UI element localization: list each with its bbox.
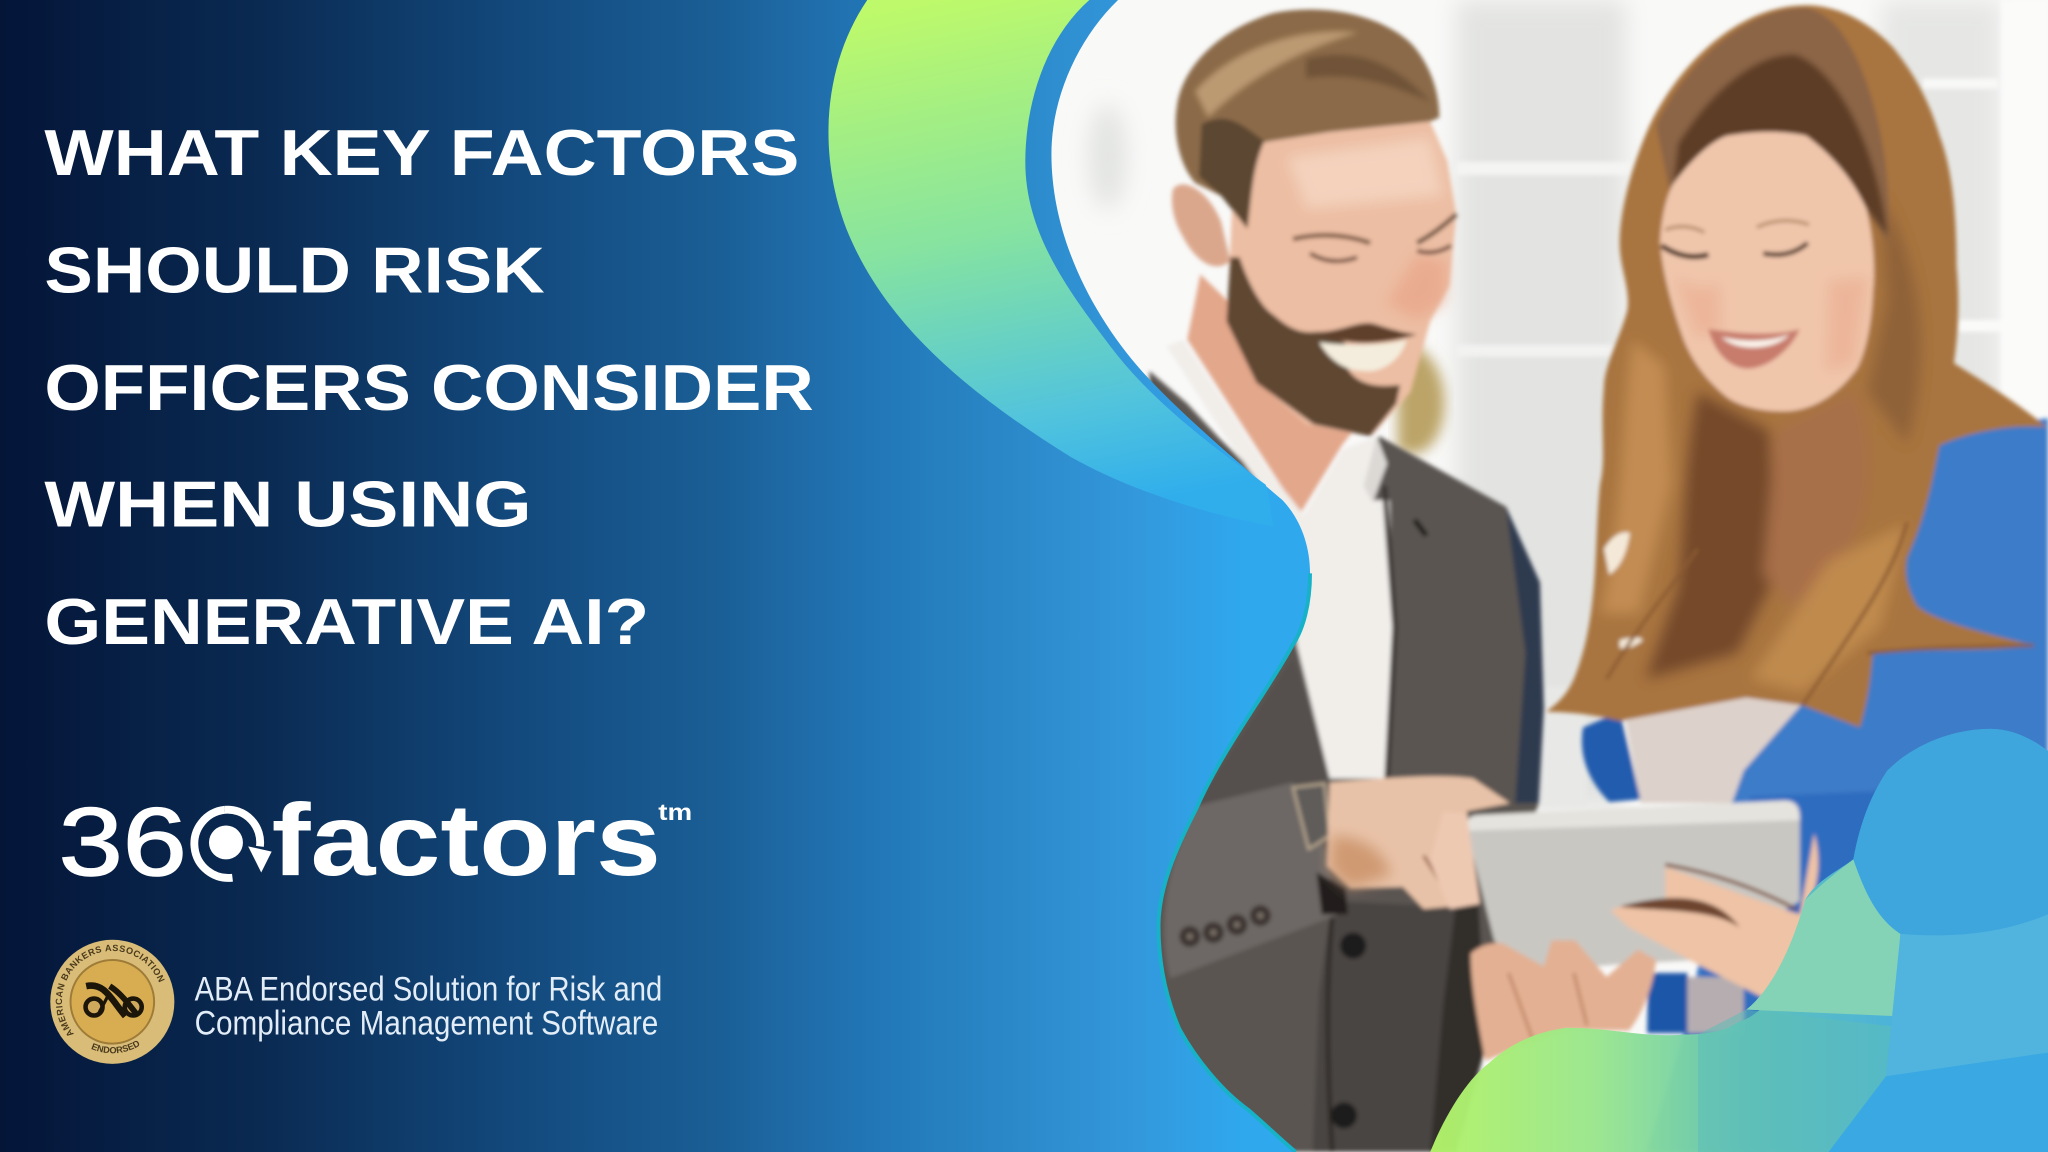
woman: hair shading xyxy=(1600,196,1921,692)
photo: two colleagues looking at a tablet xyxy=(1019,0,2048,1152)
man: left jacket front xyxy=(1196,658,1330,806)
title: GENERATIVE AI? xyxy=(44,585,649,658)
badge: ABA endorsed seal: ENDORSED xyxy=(91,1040,140,1054)
endorsement text xyxy=(195,970,662,1042)
icon: aba monogram xyxy=(86,986,142,1016)
icon: circular arrow zero xyxy=(194,810,272,878)
man: shirt xyxy=(1166,340,1394,778)
man: navy back of jacket xyxy=(1506,507,1544,803)
woman: blue jacket xyxy=(1646,418,2048,1152)
badge: ABA endorsed seal: AMERICAN BANKERS ASSOCIATION xyxy=(56,944,165,1036)
title: OFFICERS CONSIDER xyxy=(44,351,814,424)
logo: 360factors: 36 xyxy=(59,789,187,896)
woman: eyes xyxy=(1661,246,1708,257)
logo: 360factors: tm xyxy=(658,799,692,825)
title xyxy=(44,116,814,658)
man: lapel seam xyxy=(1384,486,1395,778)
title: WHEN USING xyxy=(44,467,532,540)
man's fingers over tablet xyxy=(1430,812,1480,909)
logo: 360factors: factors xyxy=(272,783,661,897)
man: jacket buttons xyxy=(1340,933,1366,959)
man: sleeve with buttons xyxy=(1164,782,1336,978)
green wave xyxy=(828,0,1273,526)
woman: hair xyxy=(1546,5,2047,728)
man: ear xyxy=(1172,184,1230,266)
man: watch xyxy=(1293,784,1330,849)
man: eyes and eyebrows xyxy=(1293,235,1370,243)
decorative blob: lower right translucent wave xyxy=(1430,729,2048,1152)
woman: smile xyxy=(1708,329,1800,369)
man: neck xyxy=(1187,274,1384,515)
title: SHOULD RISK xyxy=(44,234,545,307)
endorsement text: ABA Endorsed Solution for Risk and xyxy=(195,970,662,1008)
logo: 360factors xyxy=(59,783,692,897)
woman: left hand xyxy=(1471,940,1656,1061)
badge: ABA endorsed seal xyxy=(50,940,174,1064)
woman: top xyxy=(1620,686,1818,803)
man: hand xyxy=(1327,776,1510,909)
photo background: bright office windows xyxy=(1019,0,2048,1152)
woman: face xyxy=(1660,132,1874,411)
title: WHAT KEY FACTORS xyxy=(44,116,799,189)
tablet xyxy=(1467,801,1800,970)
endorsement text: Compliance Management Software xyxy=(195,1004,658,1042)
man: jacket xyxy=(1149,371,1544,1152)
woman: top of hair xyxy=(1656,8,1889,242)
olive blob behind man xyxy=(1398,342,1445,454)
man: beard xyxy=(1226,257,1400,436)
woman: right hand xyxy=(1610,833,1818,1000)
blue band and left gradient panel xyxy=(0,0,1310,1152)
man: lower jacket xyxy=(1313,901,1482,1152)
man: moustache and smile xyxy=(1317,323,1417,343)
man: hair xyxy=(1176,10,1439,229)
man: face xyxy=(1228,121,1456,436)
